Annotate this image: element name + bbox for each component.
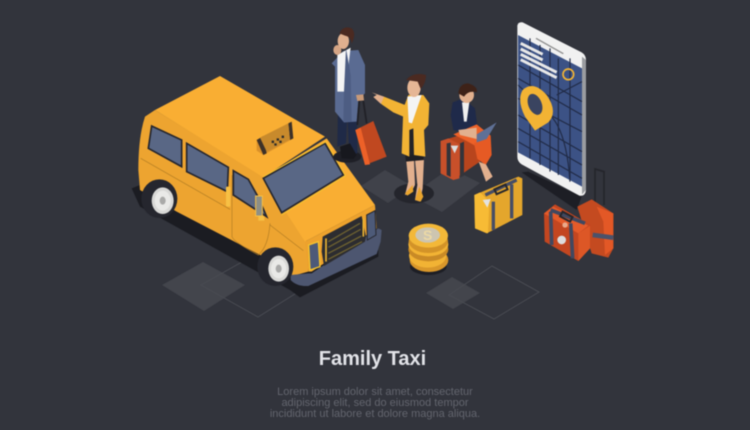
taxi van — [132, 76, 382, 297]
man with coat — [332, 27, 367, 163]
woman in yellow — [372, 74, 434, 203]
red suitcase — [355, 121, 387, 165]
floor tiles — [162, 168, 539, 319]
middle window — [187, 143, 228, 192]
passengers — [332, 27, 497, 203]
bumper — [291, 228, 382, 286]
yellow suitcase — [474, 177, 522, 233]
van body side — [138, 110, 308, 277]
door window — [233, 171, 267, 217]
taxi sign — [257, 122, 293, 155]
map roads — [518, 38, 582, 182]
location pin — [520, 86, 553, 131]
windshield — [263, 143, 343, 213]
right headlight — [367, 211, 376, 240]
description: incididunt ut labore et dolore magna aliqua. — [270, 408, 480, 420]
van hood — [263, 138, 375, 242]
rear window — [148, 126, 182, 167]
grille — [322, 216, 366, 266]
phone shadow — [522, 172, 582, 210]
phone, luggage and coins — [408, 22, 613, 275]
description: Lorem ipsum dolor sit amet, consectetur — [277, 386, 473, 398]
coin badge — [563, 69, 574, 80]
van shadow — [132, 185, 378, 297]
smartphone — [517, 22, 586, 196]
headlight — [309, 242, 320, 270]
description: adipiscing elit, sed do eiusmod tempor — [281, 397, 469, 409]
rear wheel — [141, 179, 177, 218]
front wheel — [257, 247, 293, 286]
mirror — [256, 196, 264, 221]
stack of coins — [408, 224, 448, 275]
van roof — [155, 76, 325, 177]
title: Family Taxi — [319, 348, 426, 370]
suitcase pair — [544, 169, 613, 261]
body lines — [141, 158, 303, 255]
description — [270, 386, 480, 420]
stack of coins: S — [423, 227, 432, 243]
van front — [305, 205, 377, 272]
door handle — [226, 187, 230, 207]
map text lines — [521, 43, 557, 78]
woman with laptop on suitcase — [441, 83, 497, 182]
